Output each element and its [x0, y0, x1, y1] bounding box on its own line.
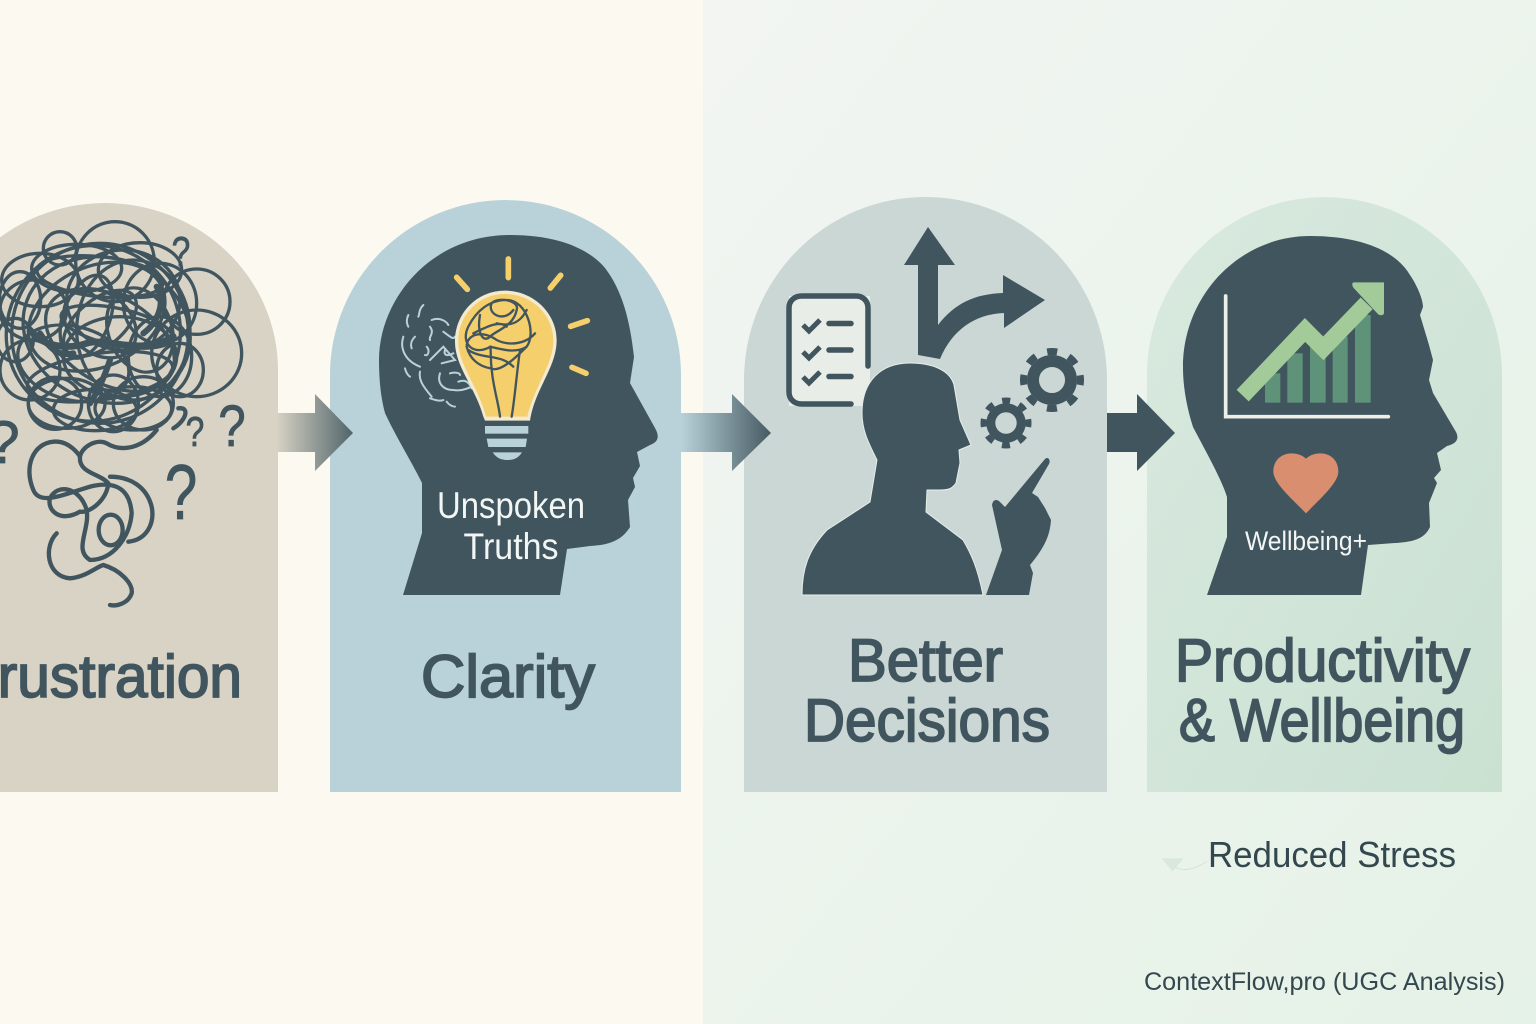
icon: pointing hand — [986, 458, 1051, 595]
icon: tangled scribble — [0, 214, 242, 560]
question marks: ? — [218, 394, 246, 459]
icon: loose thread ends — [49, 408, 185, 605]
bulb filament scribble — [466, 300, 535, 417]
label: unspoken truths: Unspoken — [437, 485, 585, 526]
question marks — [0, 230, 246, 536]
bulb base — [485, 426, 528, 460]
label: unspoken truths — [437, 485, 585, 567]
heading: better decisions — [804, 627, 1050, 754]
icon: fading brain scribble — [402, 305, 473, 407]
icon: small gear — [984, 400, 1028, 446]
source credit: ContextFlow,pro (UGC Analysis) — [1144, 968, 1505, 996]
heading: productivity and wellbeing: Productivity — [1175, 627, 1470, 694]
label: unspoken truths: Truths — [464, 526, 558, 567]
icon: growth chart — [1226, 282, 1388, 417]
icon: checklist — [789, 296, 870, 406]
heading: productivity and wellbeing: & Wellbeing — [1179, 687, 1465, 754]
icon: large gear — [1024, 352, 1080, 408]
lower tangle — [29, 430, 157, 560]
heading: better decisions: Decisions — [804, 687, 1050, 754]
callout: reduced stress: Reduced Stress — [1208, 834, 1456, 875]
question marks: ? — [172, 230, 190, 276]
heading: clarity: Clarity — [421, 643, 595, 710]
panel: clarity — [330, 200, 681, 792]
icon: head silhouette — [1183, 236, 1457, 595]
icon: head silhouette — [379, 235, 658, 595]
faint pointer arrow — [1162, 858, 1207, 872]
arrow: better decisions to productivity — [1107, 394, 1175, 471]
question marks: ? — [186, 410, 204, 456]
icon: person silhouette — [802, 363, 983, 595]
panel: better decisions — [744, 197, 1107, 792]
light rays — [457, 259, 587, 373]
panel: frustration — [0, 203, 278, 792]
trend arrow — [1243, 282, 1384, 396]
icon: heart — [1273, 453, 1338, 513]
arrow: frustration to clarity — [276, 394, 353, 471]
question marks: ? — [165, 449, 197, 536]
chart bars — [1265, 315, 1371, 403]
icon: diverging arrows — [904, 227, 1045, 359]
heading: productivity and wellbeing — [1175, 627, 1470, 754]
panel: productivity and wellbeing — [1147, 197, 1502, 792]
heading: better decisions: Better — [848, 627, 1003, 694]
label: wellbeing plus: Wellbeing+ — [1245, 526, 1367, 556]
arrow: clarity to better decisions — [681, 394, 771, 471]
icon: light bulb — [455, 259, 587, 460]
